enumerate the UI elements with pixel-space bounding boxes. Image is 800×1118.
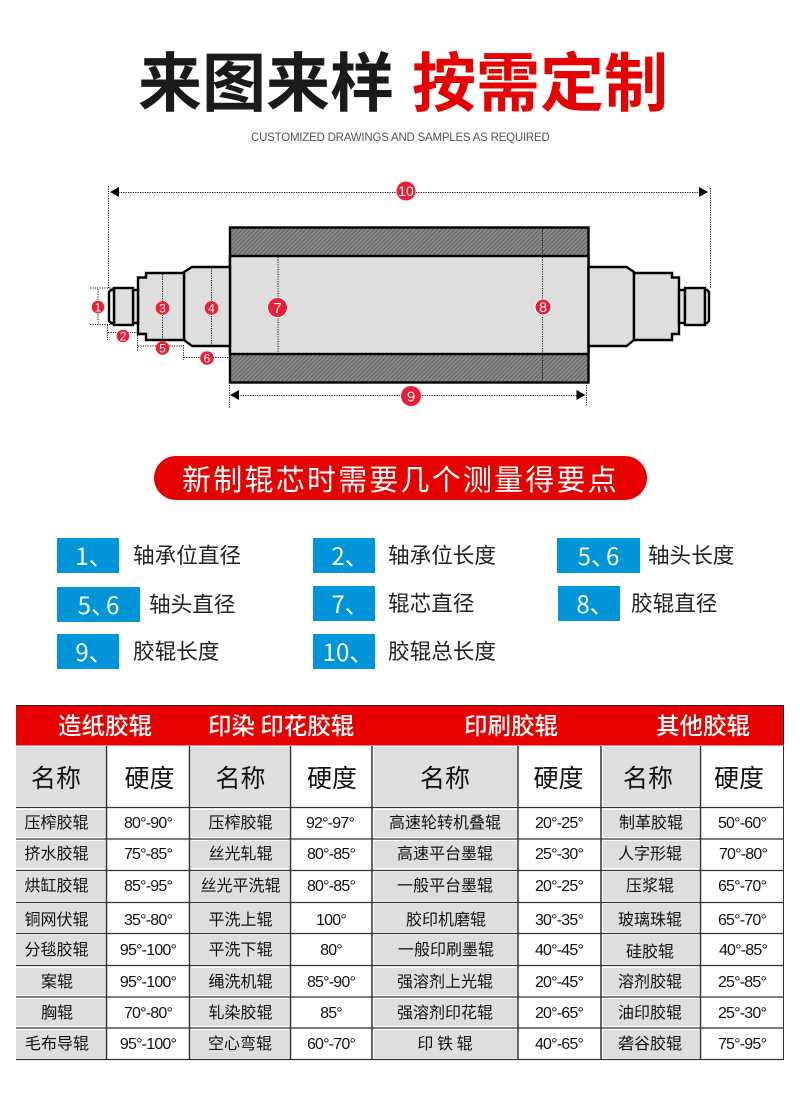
row 2: 80°-85° [307, 846, 355, 863]
legend item 10: 10、 [323, 633, 373, 668]
legend item 9: 胶辊长度 [133, 635, 219, 666]
row 6: 案辊 [41, 968, 73, 992]
row 4: 平洗上辊 [208, 906, 273, 930]
row 5: 95°-100° [120, 942, 177, 959]
legend item 1: 轴承位直径 [133, 539, 241, 570]
table header band: 印染 印花胶辊 [208, 707, 354, 741]
row 3: 压浆辊 [626, 872, 674, 896]
legend item 2: 2、 [331, 537, 369, 572]
row 2: 70°-80° [719, 846, 767, 863]
column headings: 名称 [420, 759, 470, 795]
number markers [92, 182, 551, 406]
column headings [31, 759, 764, 795]
row 1: 压榨胶辊 [24, 809, 89, 833]
legend item 2 [313, 537, 496, 573]
legend item 5,6 diameter: 5、6 [78, 586, 119, 621]
legend item 7 [313, 585, 474, 621]
legend item 5,6 diameter [57, 586, 235, 622]
legend item 1 [57, 537, 241, 573]
legend item 1: 1、 [75, 537, 113, 572]
number markers: 6 [204, 352, 211, 366]
row 6: 绳洗机辊 [208, 968, 273, 992]
number markers: 5 [159, 342, 166, 356]
legend item 7: 7、 [331, 585, 369, 620]
row 5: 80° [320, 942, 342, 959]
row 5 [24, 936, 767, 962]
row 7: 油印胶辊 [618, 999, 682, 1023]
legend item 9: 9、 [75, 633, 113, 668]
row 8: 砻谷胶辊 [618, 1030, 682, 1054]
row 8: 印 铁 辊 [417, 1030, 473, 1054]
row 5: 分毯胶辊 [24, 936, 89, 960]
number markers: 3 [159, 302, 166, 316]
row 2: 25°-30° [535, 846, 583, 863]
row 4: 铜网伏辊 [24, 906, 89, 930]
column headings: 名称 [215, 759, 266, 795]
row 1: 20°-25° [535, 815, 583, 832]
row 3: 一般平台墨辊 [397, 872, 493, 896]
roller body [230, 228, 588, 382]
number markers: 4 [208, 302, 215, 316]
row 4: 100° [316, 912, 346, 929]
row 1: 92°-97° [306, 815, 354, 832]
legend item 2: 轴承位长度 [388, 539, 496, 570]
table header band: 印刷胶辊 [464, 707, 558, 741]
column headings: 硬度 [714, 759, 764, 795]
row 4: 65°-70° [718, 912, 766, 929]
column headings: 名称 [623, 759, 673, 795]
banner: 新制辊芯时需要几个测量得要点 [182, 457, 619, 499]
legend item 10: 胶辊总长度 [388, 635, 496, 666]
legend item 9 [57, 633, 219, 669]
row 2: 挤水胶辊 [24, 840, 89, 864]
left shaft [109, 267, 230, 346]
row 4: 30°-35° [535, 912, 583, 929]
hardness table [16, 705, 784, 1060]
column headings: 硬度 [124, 759, 175, 795]
row 3: 丝光平洗辊 [200, 872, 281, 896]
row 7: 轧染胶辊 [208, 999, 273, 1023]
row 6 [41, 968, 766, 992]
row 6: 25°-85° [718, 974, 766, 991]
row 3 [24, 872, 766, 896]
row 8: 空心弯辊 [208, 1030, 272, 1054]
row 4: 胶印机磨辊 [406, 906, 486, 930]
row 3: 20°-25° [535, 878, 583, 895]
row 2: 高速平台墨辊 [397, 840, 493, 864]
legend [57, 537, 734, 669]
row 7: 70°-80° [124, 1005, 172, 1022]
legend item 8: 8、 [576, 585, 614, 620]
subtitle: CUSTOMIZED DRAWINGS AND SAMPLES AS REQUIRED [251, 132, 550, 144]
table header band [16, 706, 784, 746]
row 8 [25, 1030, 766, 1054]
row 2 [24, 840, 767, 864]
number markers: 9 [407, 388, 415, 406]
number markers: 7 [273, 300, 282, 317]
row 5: 40°-85° [719, 942, 767, 959]
row 7: 强溶剂印花辊 [397, 999, 493, 1023]
row 7: 胸辊 [41, 999, 73, 1023]
title: 来图来样 按需定制 [138, 33, 668, 125]
row 6: 20°-45° [535, 974, 583, 991]
row 1: 80°-90° [124, 815, 172, 832]
row 6: 85°-90° [307, 974, 355, 991]
row 1: 制革胶辊 [619, 809, 683, 833]
row 8: 60°-70° [307, 1036, 355, 1053]
right shaft [588, 267, 709, 346]
row 2: 75°-85° [124, 846, 172, 863]
row 4 [24, 906, 766, 930]
table grid [16, 746, 784, 1060]
row 3: 85°-95° [124, 878, 172, 895]
row 7: 25°-30° [718, 1005, 766, 1022]
row 8: 40°-65° [535, 1036, 583, 1053]
number markers: 1 [95, 300, 102, 314]
row 5: 硅胶辊 [626, 938, 674, 962]
name column shading [16, 747, 699, 1058]
legend item 5,6 length: 轴头长度 [648, 539, 734, 570]
row 7: 20°-65° [535, 1005, 583, 1022]
row 3: 80°-85° [307, 878, 355, 895]
row 8: 75°-95° [718, 1036, 766, 1053]
table header band: 造纸胶辊 [58, 707, 152, 741]
row 8: 毛布导辊 [25, 1030, 89, 1054]
legend item 10 [313, 633, 496, 669]
legend item 8 [558, 585, 717, 621]
row 1: 50°-60° [718, 815, 766, 832]
number markers: 8 [539, 299, 547, 315]
row 6: 溶剂胶辊 [618, 968, 682, 992]
table header band: 其他胶辊 [656, 707, 750, 741]
row 8: 95°-100° [120, 1036, 177, 1053]
legend item 5,6 length: 5、6 [578, 537, 619, 572]
row 7: 85° [320, 1005, 342, 1022]
row 1 [24, 809, 766, 833]
row 6: 强溶剂上光辊 [397, 968, 493, 992]
column headings: 硬度 [307, 759, 357, 795]
legend item 7: 辊芯直径 [388, 587, 474, 618]
row 2: 丝光轧辊 [208, 840, 273, 864]
dimension lines [90, 186, 710, 408]
column headings: 名称 [31, 759, 81, 795]
number markers: 2 [120, 330, 127, 344]
legend item 5,6 diameter: 轴头直径 [149, 588, 235, 619]
row 3: 烘缸胶辊 [24, 872, 89, 896]
roller diagram [90, 182, 711, 408]
row 1: 压榨胶辊 [208, 809, 273, 833]
row 5: 一般印刷墨辊 [398, 936, 494, 960]
row 5: 40°-45° [535, 942, 583, 959]
row 5: 平洗下辊 [208, 936, 273, 960]
row 4: 35°-80° [124, 912, 172, 929]
row 2: 人字形辊 [618, 840, 682, 864]
legend item 5,6 length [557, 537, 734, 573]
column headings: 硬度 [533, 759, 584, 795]
row 3: 65°-70° [718, 878, 766, 895]
number markers: 10 [398, 183, 414, 199]
legend item 8: 胶辊直径 [631, 587, 717, 618]
row 4: 玻璃珠辊 [618, 906, 682, 930]
row 1: 高速轮转机叠辊 [389, 809, 501, 833]
arrowheads [110, 187, 708, 400]
row 7 [41, 999, 766, 1023]
row 6: 95°-100° [120, 974, 177, 991]
